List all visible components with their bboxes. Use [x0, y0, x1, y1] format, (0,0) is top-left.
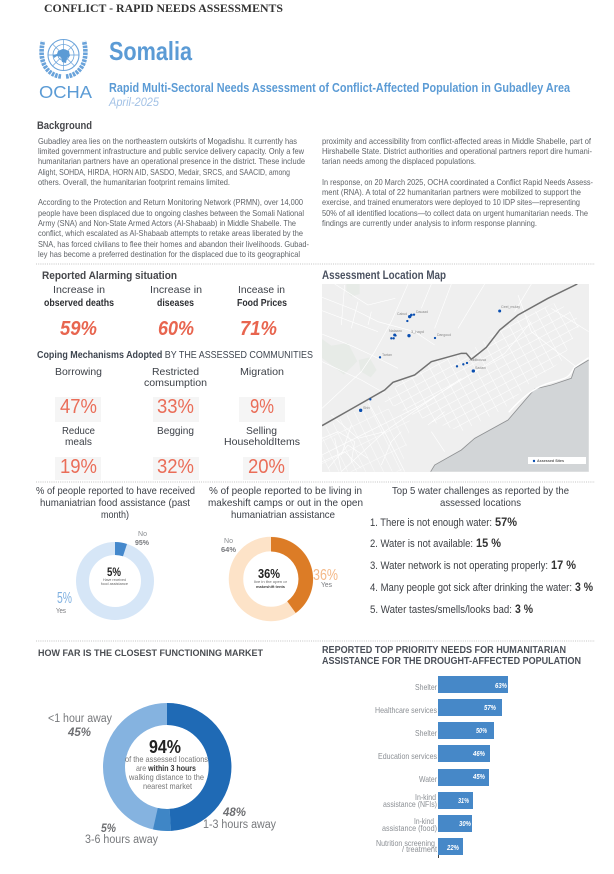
water list: 3. Water network is not operating properly:	[370, 560, 548, 572]
donut chart: food assistance: food assistance	[101, 582, 128, 586]
label: one to three hours: 48%	[222, 805, 246, 819]
stat: observed deaths: Increase in	[53, 284, 105, 296]
makeshift heading: % of people reported to be living in	[209, 485, 362, 497]
bar chart: priority needs: 50%	[476, 726, 487, 735]
water list: 4. Many people got sick after drinking the water:	[370, 582, 572, 594]
bar chart: priority needs: 57%	[484, 703, 497, 712]
water list: 2. Water is not available:	[370, 538, 473, 550]
site labels: Shiv	[363, 406, 370, 410]
stat: migration	[239, 366, 285, 422]
coping heading: Coping Mechanisms Adopted BY THE ASSESSED COMMUNITIES	[37, 350, 313, 361]
stat: food prices	[237, 284, 287, 340]
site labels: Ceel_mulay	[501, 305, 520, 309]
stat: restricted consumption: comsumption	[144, 377, 207, 389]
panel: coping mechanisms	[37, 350, 313, 480]
donut chart: food assistance: 95%	[135, 538, 149, 547]
water list: 17 %	[551, 560, 576, 572]
donut chart: market distance	[114, 703, 231, 831]
stat: diseases: diseases	[157, 298, 194, 309]
priority heading: ASSISTANCE FOR THE DROUGHT-AFFECTED POPULATION	[322, 656, 581, 667]
background text left column: Gubadley area lies on the northeastern outskirts of Mogadishu. It currently has	[38, 137, 297, 146]
label: under one hour	[48, 713, 112, 739]
background text left column: According to the Protection and Return Monitoring Network (PRMN), over 14,000	[38, 198, 303, 207]
priority heading: REPORTED TOP PRIORITY NEEDS FOR HUMANITARIAN	[322, 645, 566, 656]
donut chart: food assistance: 5%	[107, 565, 121, 579]
stat: selling household items: HouseholdItems	[224, 436, 300, 448]
stat: restricted consumption: Restricted	[152, 366, 199, 378]
donut chart: food assistance: No	[138, 529, 147, 538]
water list: 3 %	[515, 604, 533, 616]
panel: food assistance	[36, 485, 195, 615]
stat: food prices: Food Prices	[237, 298, 287, 309]
donut chart: market distance: nearest market	[143, 781, 193, 791]
icon: OCHA logo	[39, 40, 92, 102]
stat: begging: 32%	[157, 456, 194, 478]
donut chart: makeshift camps	[221, 536, 338, 614]
market heading: HOW FAR IS THE CLOSEST FUNCTIONING MARKET	[38, 648, 263, 659]
stat: reduce meals: Reduce	[62, 425, 95, 437]
sea	[431, 360, 589, 472]
background text left column: others. Overall, the humanitarian footprint remains limited.	[38, 178, 230, 187]
stat: food prices: Incease in	[238, 284, 285, 296]
assessed sites	[359, 309, 501, 412]
donut chart: market distance: 94%	[149, 737, 181, 757]
bar chart: priority needs: Healthcare services	[375, 705, 437, 715]
donut chart: makeshift camps: live in the open or	[254, 580, 288, 584]
food assistance heading: % of people reported to have received	[36, 485, 195, 497]
donut chart: market distance: are within 3 hours	[136, 763, 196, 773]
water heading	[392, 485, 569, 509]
background text left column: conflict, which escalated as Al-Shabaab attempts to retake areas liberated by the	[38, 229, 303, 238]
stat: reduce meals	[55, 425, 101, 480]
stat: diseases: 60%	[158, 318, 194, 340]
site labels: Dangoud	[437, 333, 451, 337]
bar chart: priority needs: In-kind	[414, 816, 434, 826]
stat: migration: 9%	[250, 396, 274, 418]
date: April-2025	[108, 95, 159, 109]
donut chart: market distance: walking distance to the	[128, 772, 204, 782]
stat: begging	[153, 425, 199, 480]
label: one to three hours	[203, 805, 276, 831]
background text right column: tarian needs among the displaced populations.	[322, 157, 476, 166]
panel: priority needs	[322, 645, 581, 858]
bar chart: priority needs: In-kind	[415, 792, 436, 802]
priority heading	[322, 645, 581, 667]
water list: 3 %	[575, 582, 593, 594]
background text right column: ment (RNA). A total of 22 humanitarian partners were mobilized to support the	[322, 188, 581, 197]
site labels	[363, 305, 520, 410]
donut chart: makeshift camps: 36%	[313, 567, 338, 584]
makeshift heading: makeshift camps or out in the open	[208, 497, 363, 509]
site labels: 3_hayd	[411, 330, 424, 334]
background text left column: ley has become a preferred destination for the displaced due to its geographical	[38, 250, 300, 259]
donut chart: market distance: of the assessed locations	[125, 754, 208, 764]
site labels: Jiddibousa	[469, 358, 486, 362]
background heading: Background	[37, 120, 92, 132]
water list: 1. There is not enough water:	[370, 517, 492, 529]
stat: borrowing: 47%	[60, 396, 97, 418]
water list: 5. Water tastes/smells/looks bad:	[370, 604, 512, 616]
donut chart: makeshift camps: Yes	[321, 580, 332, 589]
background text left column: limited government infrastructure and public service delivery capacity. Only a few	[38, 147, 304, 156]
food assistance heading	[36, 485, 195, 521]
bar chart: priority needs: / treatment	[402, 844, 438, 854]
map legend: Assessed Sites	[537, 459, 564, 463]
label: under one hour: <1 hour away	[48, 713, 112, 725]
site labels: Sadani	[475, 366, 486, 370]
bar chart: priority needs: 63%	[495, 681, 508, 690]
bar chart: priority needs: Water	[419, 774, 437, 784]
panel: closest market	[38, 648, 276, 846]
label: under one hour: 45%	[67, 725, 91, 739]
background text left column: people have been displaced due to ongoing clashes between the Somali National	[38, 209, 304, 218]
map heading: Assessment Location Map	[322, 270, 446, 282]
background text left column: Alight, SOHDA, HIRDA, HORN AID, SASDO, Medair, SRCS, and SAACID, among	[38, 168, 290, 177]
stat: begging: Begging	[157, 425, 194, 437]
donut chart: food assistance: Have received	[103, 578, 126, 582]
background text right column: 50% of all identified locations—to collect data on urgent humanitarian needs. The	[322, 209, 588, 218]
main road	[322, 284, 577, 426]
site labels: Tartan	[382, 353, 392, 357]
background text right column	[322, 137, 593, 228]
stat: borrowing	[55, 366, 102, 422]
bar chart: priority needs: Shelter	[415, 728, 437, 738]
background text left column	[38, 137, 309, 259]
donut chart: food assistance: 5%	[57, 590, 72, 607]
bar chart: priority needs: Nutrition screening	[376, 838, 435, 848]
donut chart: makeshift camps: makeshift tents	[256, 585, 285, 589]
site labels: Dauaad	[416, 310, 428, 314]
bar chart: priority needs: assistance (NFIs)	[383, 799, 437, 809]
stat: observed deaths: observed deaths	[44, 298, 114, 309]
bar chart: priority needs: assistance (food)	[382, 823, 437, 833]
donut chart: food assistance: Yes	[56, 606, 66, 615]
makeshift heading	[208, 485, 363, 521]
stat: diseases	[150, 284, 202, 340]
label: three to six hours: 3-6 hours away	[85, 834, 158, 846]
stat: reduce meals: 19%	[60, 456, 97, 478]
donut chart: food assistance	[56, 529, 149, 615]
stat: food prices: 71%	[240, 318, 277, 340]
bar chart: priority needs: 31%	[458, 796, 469, 805]
panel: reported alarming situation	[42, 270, 287, 340]
bar chart: priority needs: 46%	[472, 749, 486, 758]
title: Somalia: Somalia	[109, 36, 192, 66]
report type heading: CONFLICT - RAPID NEEDS ASSESSMENTS	[44, 1, 283, 15]
bar chart: priority needs	[375, 676, 508, 858]
water heading: Top 5 water challenges as reported by the	[392, 485, 569, 497]
background text right column: findings are currently under analysis to inform response planning.	[322, 219, 537, 228]
donut chart: makeshift camps: 36%	[258, 567, 280, 581]
stat: restricted consumption	[144, 366, 207, 422]
makeshift heading: humaniatrian assistance	[231, 509, 335, 521]
background section	[37, 120, 309, 259]
donut chart: makeshift camps: No	[224, 536, 233, 545]
bar chart: priority needs: 22%	[446, 843, 460, 852]
donut chart: makeshift camps: 64%	[221, 545, 236, 554]
background text left column: SNA, has forced civilians to flee their homes and abandon their livelihoods. Gubad-	[38, 240, 309, 249]
panel: water challenges	[370, 485, 593, 616]
stat: observed deaths: 59%	[60, 318, 97, 340]
bar chart: priority needs: Shelter	[415, 682, 437, 692]
map legend	[528, 457, 586, 464]
stat: observed deaths	[44, 284, 114, 340]
water list	[370, 517, 593, 616]
label: one to three hours: 1-3 hours away	[203, 819, 276, 831]
bar chart: priority needs: 45%	[472, 772, 486, 781]
site labels: Cabud	[397, 312, 407, 316]
alarming heading: Reported Alarming situation	[42, 270, 177, 282]
water list: 15 %	[476, 538, 501, 550]
stat: restricted consumption: 33%	[157, 396, 194, 418]
food assistance heading: humaniatrian food assistance (past	[40, 497, 190, 509]
background text right column: Hirshabelle State. District authorities and operational partners report dire humani-	[322, 147, 592, 156]
background text left column: Army (SNA) and Non-State Armed Actors (Al-Shabaab) in Middle Shabelle. The	[38, 219, 296, 228]
stat: selling household items: 20%	[248, 456, 285, 478]
water list: 57%	[495, 517, 517, 529]
water heading: assessed locations	[440, 497, 521, 509]
map: assessed locations	[322, 284, 589, 472]
icon: OCHA logo: OCHA	[39, 82, 92, 102]
stat: diseases: Increase in	[150, 284, 202, 296]
stat: reduce meals: meals	[65, 436, 92, 448]
stat: borrowing: Borrowing	[55, 366, 102, 378]
stat: selling household items	[224, 425, 300, 480]
stat: migration: Migration	[240, 366, 284, 378]
site labels: Nalaaro	[389, 329, 402, 333]
background text right column: proximity and accessibility from conflict-affected areas in Middle Shabelle, part of	[322, 137, 592, 146]
panel: makeshift camps	[208, 485, 363, 614]
bar chart: priority needs: Education services	[378, 751, 437, 761]
background text right column: exercise, and trained enumerators were deployed to 10 IDP sites—representing	[322, 198, 580, 207]
street grids	[385, 302, 581, 432]
background text left column: humanitarian partners have an operational presence in the district. These include	[38, 157, 305, 166]
label: three to six hours: 5%	[101, 821, 116, 835]
label: three to six hours	[85, 821, 158, 846]
food assistance heading: month)	[101, 509, 129, 521]
bar chart: priority needs: 30%	[459, 819, 472, 828]
stat: selling household items: Selling	[246, 425, 277, 437]
